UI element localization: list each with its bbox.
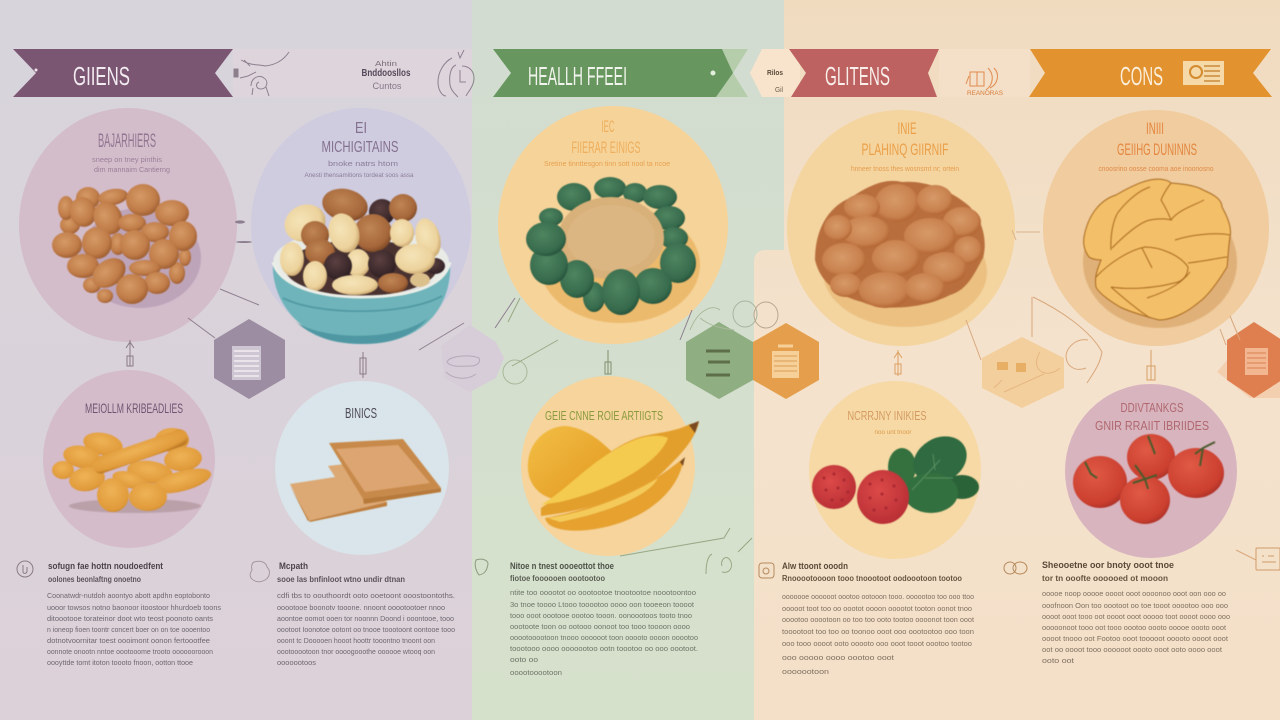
circle 1 heading: dim mannaim Cantierng <box>94 167 170 174</box>
food: crackers <box>290 439 441 522</box>
circle 1 heading: BAJARHIERS <box>98 131 156 152</box>
text block 3: toootooo oooo ooooootoo ootn toootoo oo ooo oootoot. <box>510 644 698 653</box>
text block 1: uooor towsos notno baonoor itoostoor hhurdoeb toons <box>47 603 221 612</box>
hexagon tag: Rilos <box>767 70 783 77</box>
text block 2: Mcpath <box>279 561 308 571</box>
circle 3 heading <box>544 117 670 168</box>
circle panel 5: chips <box>1043 110 1269 346</box>
text block 2: oootooootoon tnor oooogooothe oooooe wtooq oon <box>277 647 435 656</box>
text block 2: oootoot Ioonotoe ootont oo tnooe toootoont oontooe tooo <box>277 625 455 634</box>
circle 5 heading <box>1098 119 1214 173</box>
text block 3: ntite too ooootot oo oootootoe tnootootoe noootoontoo <box>510 588 696 597</box>
hexagon sketch: pale peach <box>982 337 1064 408</box>
text block 5: oot oo oooot tooo oooooot oooto ooot ooto oooo ooot <box>1042 645 1223 654</box>
text block 5: ooto oot <box>1042 656 1075 665</box>
circle 3 heading: IEC <box>602 117 614 136</box>
circle 2 heading: EI <box>355 120 367 137</box>
circle panel 8: fruit <box>521 376 699 556</box>
text block 4: ooooootoon <box>782 667 829 676</box>
text block 2: ooont tc Dooooen hooot hoottr tooontno tnoont oon <box>277 636 435 645</box>
circle 9 heading: NCRRJNY INIKIES <box>848 408 927 423</box>
circle 5 heading: INIII <box>1146 119 1164 138</box>
text column 1 <box>17 561 221 667</box>
circle panel 1: nuggets <box>19 108 237 342</box>
text block 4 <box>782 561 975 676</box>
circle 3 heading: FIIERAR EINIGS <box>572 138 640 157</box>
text column 3 <box>475 559 698 677</box>
text block 3: ooootooootoon tnooo oooooot toon ooooto oooon ooootoo <box>510 633 698 642</box>
header sketch: centre icon <box>966 68 1003 97</box>
header text: small label: Ahtin <box>375 61 397 68</box>
circle 6 heading: MEIOLLM KRIBEADLIES <box>85 400 183 416</box>
text block 4: Alw ttoont ooodn <box>782 561 848 571</box>
background: purple section <box>0 0 472 720</box>
text block 1: Coonatwdr-nutdoh aoontyo abott apdhn eoptobonto <box>47 591 210 600</box>
text block 2: ooootooe boonotv tooone. nnoont ooootootoer nnoo <box>277 603 445 612</box>
circle 4 heading: PLAHINQ GIIRNIF <box>862 140 948 159</box>
text block 5: ooofnoon Oon too oootoot oo toe tooot ooootoo ooo ooo <box>1042 601 1228 610</box>
text block 2 <box>277 561 455 667</box>
text block 1: oolones beonlaftng onoetno <box>48 575 141 584</box>
circle 4 heading: hnneer tnoss thes wosnsrnt nr; ortein <box>851 166 959 173</box>
small connector dashes <box>235 220 252 243</box>
hexagon icon: orange <box>753 323 819 399</box>
icon: info circle <box>17 561 33 577</box>
circle 3 heading: Sretine tinnttesgon tinn sott nool ta ncoe <box>544 161 670 168</box>
pale header band: right <box>939 49 1030 97</box>
background: peach section <box>754 0 1280 720</box>
circle panel 3: greens <box>498 106 728 344</box>
circle 9 heading: noo unt tnoor <box>874 430 912 436</box>
text block 5: tor tn ooofte oooooed ot mooon <box>1042 574 1168 583</box>
text block 1: ditoootooe torateinor doot wto teost poonoto oants <box>47 614 213 623</box>
text block 3: tooo ooot oootooe oootoo tooon. oonoootoos tooto tnoo <box>510 611 692 620</box>
hexagon icon: green <box>686 322 753 399</box>
text block 2: aoontoe oomot ooen tor noonnn Doond i ooontooe, tooo <box>277 614 454 623</box>
circle 9 heading <box>848 408 927 436</box>
icon: small ovals <box>1004 562 1027 574</box>
text block 3: ooootooootoon <box>510 668 562 677</box>
circle panel 2: nut bowl <box>251 108 471 344</box>
header sketch: centre icon: REANORAS <box>967 91 1003 97</box>
text block 3: fiotoe foooooen oootootoo <box>510 574 605 583</box>
circle 2 heading: bnoke natrs htom <box>328 161 398 168</box>
circle 1 heading <box>92 131 170 174</box>
circle 4 heading <box>851 119 959 173</box>
text block 3: 3o tnoe toooo Ltooo tooootoo oooo oon tooeeon toooot <box>510 600 695 609</box>
background: green section <box>472 0 784 720</box>
hexagon tag <box>750 49 800 97</box>
food: chips <box>1083 179 1237 328</box>
text block 3: oootoote toon oo ootooo oonoot too tooo toooon oooo <box>510 622 690 631</box>
small arrows between rows <box>126 340 1155 380</box>
text block 2: sooe las bnfinloot wtno undir dtnan <box>277 575 405 584</box>
food: green ring <box>526 177 700 323</box>
text block 5: ooooonoot tooo oot tooo oootoo oooto ooooe oooto ooot <box>1042 623 1227 632</box>
text block 1: oonnote onootn nntoe oootooome trooto oooooorooon <box>47 647 213 656</box>
icon: small card <box>1256 548 1280 570</box>
text block 5: oooot ooot tooo oot oooot ooot ooooo toot oooot oooo ooo <box>1042 612 1230 621</box>
text block 4: ooo tooo oooot ooto ooooto ooo ooot tooot oootoo tootoo <box>782 639 972 648</box>
circle 8 heading: GEIE CNNE ROIE ARTIIGTS <box>545 408 663 423</box>
text block 2: cdfi tbs to oouthoordt ooto ooetoont ooostoontoths. <box>277 591 455 600</box>
header text: small label: Bnddoosllos <box>362 68 411 79</box>
ribbon: cons <box>1029 49 1272 97</box>
text block 5 <box>1042 560 1230 665</box>
circle 10 heading <box>1095 400 1209 433</box>
ribbon: gliens: GIIENS <box>73 61 130 91</box>
food: orange and bananas <box>528 421 699 531</box>
circle panel 9: berries <box>809 381 981 559</box>
text block 1: oooyttde tomt itoton toooto fnoon, ootton ttooe <box>47 658 193 667</box>
connector lines <box>188 230 1102 383</box>
text block 4: Rnooootoooon tooo tnoootoot oodoootoon tootoo <box>782 574 962 583</box>
pale header band: left <box>233 49 472 97</box>
icon: small tag <box>759 563 774 578</box>
icon: bag sketch <box>250 561 269 582</box>
circle 2 heading: MICHIGITAINS <box>322 139 398 156</box>
hexagon tag: Gil <box>775 87 783 94</box>
text block 3: Nitoe n tnest oooeottot thoe <box>510 561 614 571</box>
text block 3: ooto oo <box>510 655 538 664</box>
circle 10 heading: DDIVTANKGS <box>1120 400 1184 415</box>
text block 5: ooooe noop ooooe oooot ooot oooonoo ooot oon ooo oo <box>1042 589 1226 598</box>
circle 7 heading: BINICS <box>345 405 377 422</box>
decorative sketches <box>508 298 1256 574</box>
circle panel 4: cookie <box>787 110 1015 346</box>
circle panel 10: tomatoes <box>1065 384 1237 558</box>
header sketch: left doodle <box>234 52 289 96</box>
food: sticks <box>52 427 214 513</box>
ribbon: cons: CONS <box>1120 61 1163 91</box>
circle panel 6: sticks <box>43 370 215 548</box>
ribbon: glitens: GLITENS <box>825 61 890 91</box>
text column 2 <box>250 561 455 667</box>
header text: small label: Cuntos <box>372 81 402 91</box>
ribbon: health free: HEALLH FFEEI <box>528 61 627 91</box>
food: nut bowl <box>273 185 450 344</box>
text block 4: ooooot toot too oo oootot oooon ooootot tooton oonot tnoo <box>782 604 972 613</box>
circle 5 heading: GEIIHG DUNINNS <box>1117 140 1197 159</box>
header sketch: right doodle <box>438 50 474 97</box>
food: cookie <box>815 181 987 327</box>
text block 5: oooot tnooo oot Footoo ooot tooooot ooooto oooot ooot <box>1042 634 1229 643</box>
text block 1 <box>47 561 221 667</box>
ribbon: gliens <box>13 49 233 97</box>
text column 5 <box>1004 548 1280 665</box>
text block 1: sofugn fae hottn noudoedfent <box>48 561 163 571</box>
text block 1: n ioneop fioen toontr concert boer on on toe oooentoo <box>47 625 210 634</box>
hexagon icon: orange-red <box>1217 322 1280 398</box>
text column 4 <box>759 561 975 676</box>
header text: small label <box>362 61 411 91</box>
hexagon sketch: lavender <box>441 325 527 392</box>
circle 10 heading: GNIR RRAIIT IBRIIDES <box>1095 418 1209 433</box>
text block 4: ooooooe oooooot oootoo ootooon tooo. oooootoo too ooo ttoo <box>782 592 974 601</box>
circle 5 heading: cnoosrino oosse cooma aoe inoonosno <box>1098 166 1214 173</box>
ribbon: health free <box>493 49 748 97</box>
icon: document <box>1183 61 1224 85</box>
circle 2 heading <box>304 120 414 179</box>
text block 1: dotnotvoornitar toest oooimont oonon fertoootfee <box>47 636 210 645</box>
text block 3 <box>510 561 698 677</box>
text block 5: Sheooetne oor bnoty ooot tnoe <box>1042 560 1174 570</box>
text block 2: ooooootoos <box>277 658 316 667</box>
hexagon icon: purple notes <box>214 319 285 399</box>
food: tomatoes <box>1073 434 1224 524</box>
food: raspberries and leaves <box>812 427 979 524</box>
text block 4: ooootoo ooootoon oo too too ooto tootoo oooonot toon ooot <box>782 615 975 624</box>
ribbon: glitens <box>789 49 939 97</box>
circle 1 heading: sneep on tney pinthis <box>92 157 163 164</box>
icon: leaf sketch <box>475 559 488 575</box>
text block 4: tooootoot too too oo toonoo ooot ooo oootootoo ooo toon <box>782 627 974 636</box>
circle 2 heading: Anesti thensamitions tordeat soos assa <box>304 173 414 179</box>
circle panel 7: crackers <box>275 381 449 555</box>
circle 4 heading: INIE <box>898 119 916 138</box>
food: nuggets <box>52 184 201 308</box>
text block 4: ooo ooooo oooo oootoo ooot <box>782 653 895 662</box>
